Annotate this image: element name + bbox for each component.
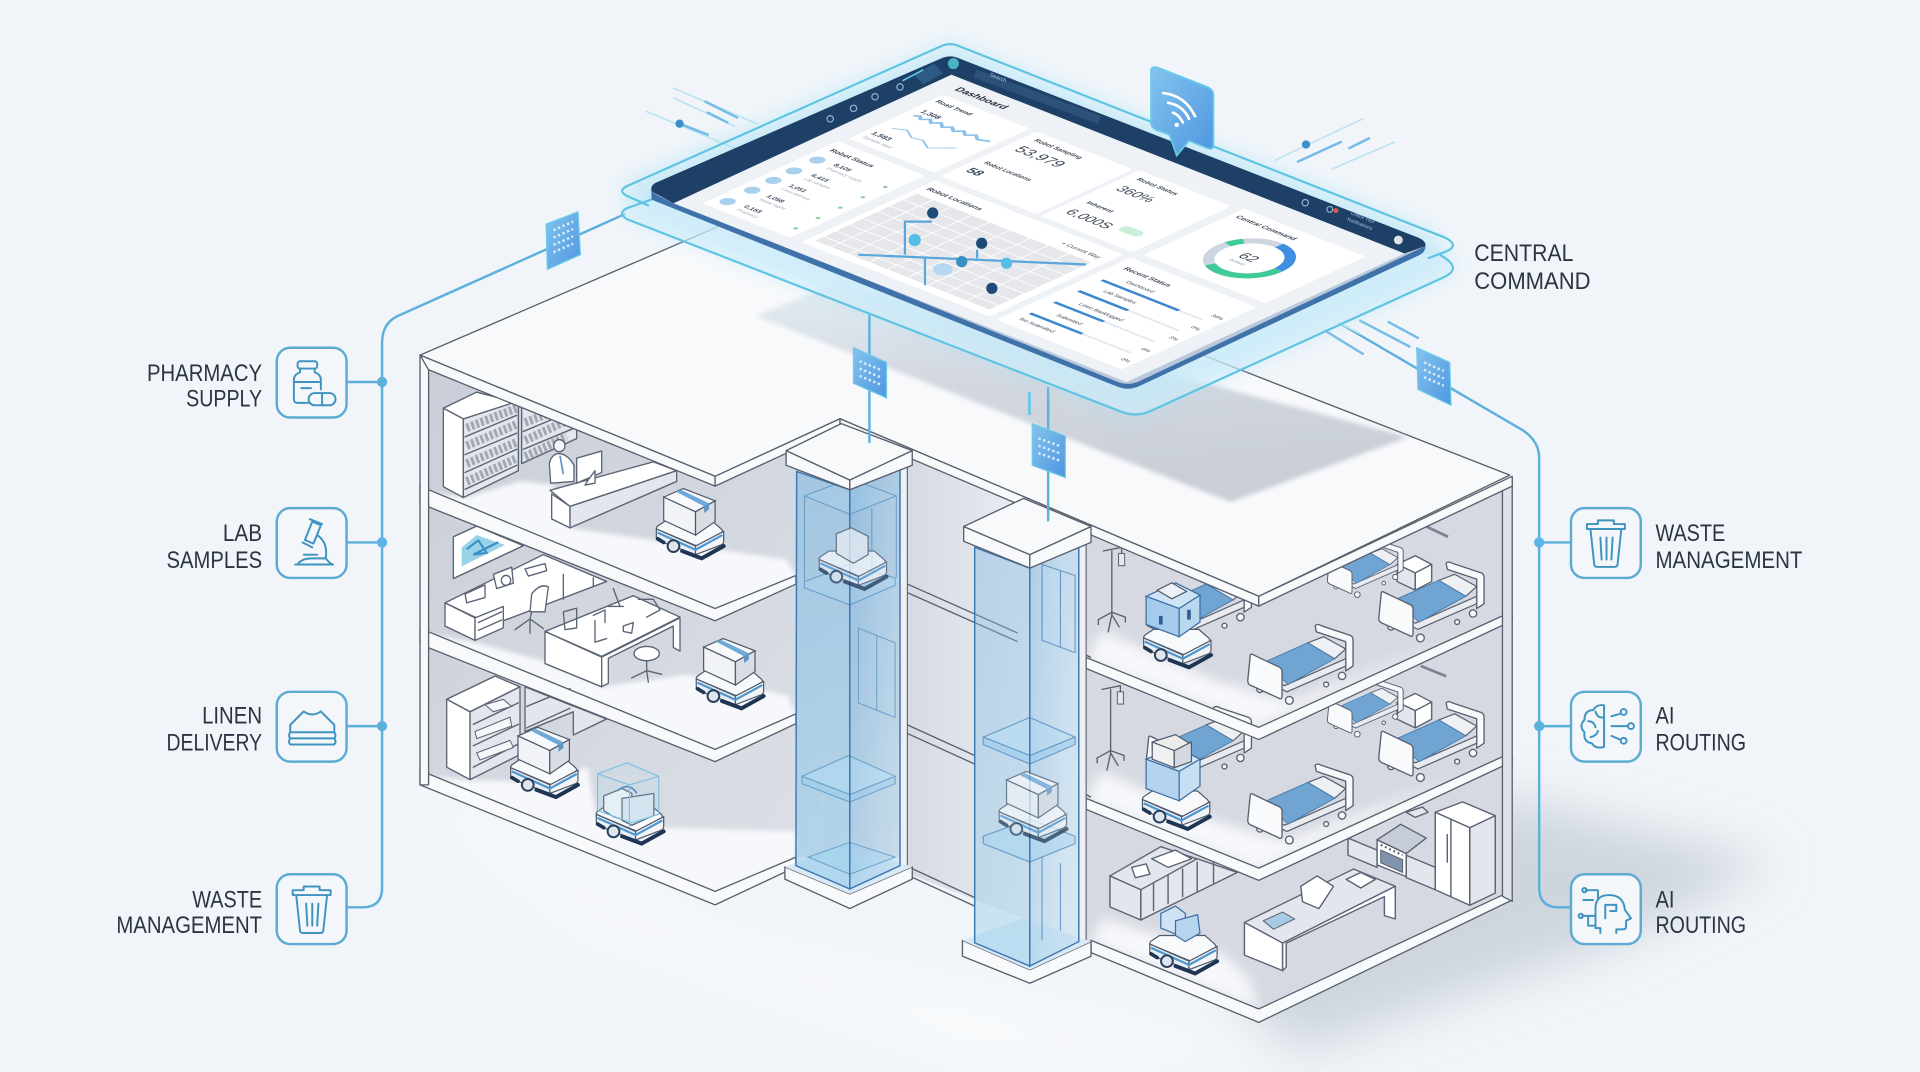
callout: ai routing head: AI [1655,886,1674,913]
recent status card: Recent Status [1121,266,1175,288]
lab centre table [545,589,680,687]
callout: waste management right: MANAGEMENT [1655,547,1802,574]
donut card: Active [1226,258,1246,267]
recent status card: 0% [1138,348,1152,354]
kitchen island [1244,869,1395,971]
dashboard title: Dashboard [951,86,1011,111]
recent status card: 34% [1208,314,1225,321]
robot: kitchen floor [1150,906,1217,973]
robot list card: 1,051 [786,184,808,193]
donut card: 62 [1233,251,1263,264]
robot: upper ward [1144,583,1211,667]
stat card 1: 58 [962,166,989,177]
floors left wing [430,481,798,894]
lab chair [515,586,548,633]
glass [796,468,900,889]
recent status card: Linen Backlogged [1076,303,1125,322]
callout: waste management left [116,874,347,944]
callout: linen delivery: DELIVERY [167,730,262,757]
back wall between elevators [904,453,1259,943]
lower car and door [802,628,895,875]
recent status card: 3% [1166,336,1180,342]
callout: waste management left: MANAGEMENT [116,912,262,939]
kitchen counter [1110,847,1237,920]
upper glass plate [622,44,1453,258]
car [983,564,1075,940]
roof [420,195,1512,606]
trend chart card: 1,583 [868,131,895,142]
recent status card: Ton Submitted [1016,317,1056,334]
callout: lab samples: LAB [223,520,262,547]
room walls left wing [429,362,907,894]
glass [975,546,1079,966]
robot: lab floor [696,639,764,708]
robot list card: 1,058 [764,194,786,204]
wall side strip [1079,542,1086,943]
stat card 2 [1041,170,1231,252]
data tag right [1417,348,1451,405]
elevator 2 [962,498,1091,983]
lab back bench [445,555,607,640]
hospital beds upper ward [1146,540,1484,704]
label: central command: COMMAND [1474,268,1591,295]
glow under plates [625,44,1455,416]
stat card 2: Inherent [1084,201,1116,214]
floor slabs right wing [1086,616,1512,1022]
callout: lab samples: SAMPLES [167,547,262,574]
data flow arrows [647,88,1418,354]
callout: ai routing head [1571,874,1746,944]
kitchen back units and stove [1348,807,1435,890]
robot list card: 6,415 [808,174,831,183]
outer left wall [420,355,429,785]
building [420,195,1512,1022]
callout: linen delivery [167,692,347,762]
hospital beds lower ward [1146,680,1484,844]
callout: pharmacy supply [147,348,347,418]
stat card 1: 53,979 [1010,145,1069,169]
callout: linen delivery: LINEN [202,703,262,730]
linen shelving [447,676,607,780]
robot: glass cargo [596,763,664,844]
donut card [1143,209,1366,303]
floors right wing [1086,631,1457,1010]
robot list card: 8,105 [831,163,853,173]
recent status card: Dashboard [1124,281,1156,294]
ground shadow around building [404,784,1775,1065]
robot list card: Pharmacy supply [824,167,864,183]
callout: ai routing brain: ROUTING [1655,730,1746,757]
recent status card: 0% [1188,326,1202,332]
stat card 1 [940,131,1133,214]
top bar icons: Notifications [1346,217,1374,232]
cap [786,424,912,490]
trend chart card [849,95,1030,173]
top bar icons: Search [989,72,1007,84]
map card: + Current Way [1059,242,1104,260]
reception desk [550,451,677,528]
robot list card: Lab samples [801,177,833,190]
label: central command: CENTRAL [1474,240,1573,267]
elevator 1 [785,424,912,909]
robot list card [703,141,925,238]
callout: pharmacy supply: PHARMACY [147,360,262,387]
callout: waste management right [1571,508,1802,578]
floor slabs left wing [420,485,796,905]
dashboard screen [674,75,1404,382]
recent status card: Submitted [1054,314,1084,326]
stat card 2: 360% [1111,184,1160,205]
map card [801,180,1123,316]
robot: pharmacy floor [656,489,724,558]
callout: waste management right: WASTE [1655,520,1725,547]
donut card: Central Command [1233,214,1300,241]
trend chart card: 1,308 [918,109,945,120]
nightstands [1397,556,1432,728]
tablet body [651,56,1425,389]
furniture left wing [443,392,680,780]
data tag centre right [1032,424,1065,478]
map card: Robot Locations [924,187,986,211]
robot: linen floor [511,727,578,797]
robot list card: 0,153 [741,205,764,214]
callout: ai routing brain [1571,692,1746,762]
upper car [804,479,896,605]
robot list card: Linen delivery [779,188,813,202]
robot list card: Waste mgmt [756,198,788,211]
callout: lab samples [167,508,347,578]
pharmacist [549,440,574,483]
refrigerator [1435,802,1495,905]
pharmacy shelving [443,392,577,497]
recent status card [996,258,1256,369]
tablet shadow on roof [756,284,1408,502]
robot list card: Pharmacy [734,209,760,219]
recent status card: Lab Samples [1101,290,1138,305]
iv stands [1097,547,1125,770]
cap [964,498,1091,568]
recent status card: 0% [1118,358,1132,364]
furniture right wing [1110,525,1495,971]
robot in shaft [999,771,1067,841]
stat card 1: Robot Sampling [1032,139,1084,160]
callout: waste management left: WASTE [192,886,262,913]
map routes and pins [858,207,1086,294]
stat card 2: Robot Status [1134,178,1180,196]
base [962,918,1091,983]
room walls right wing [1084,485,1504,1016]
wall side strip [900,463,907,872]
robot: lower ward [1142,735,1210,829]
callout: ai routing brain: AI [1655,703,1674,730]
outer right wall [1502,480,1512,901]
data tag centre left [853,348,887,398]
robot in shaft [819,528,887,589]
lab wall screen [453,526,523,579]
wifi tag [1151,67,1213,156]
ward ceiling bars [1421,525,1448,676]
lower glass plate [622,200,1453,414]
trend chart card: Road Trend [933,100,974,116]
label: central command [1474,240,1591,295]
data tag left [546,212,580,269]
callout: ai routing head: ROUTING [1655,912,1746,939]
middle wall slabs [907,584,1091,906]
callout: pharmacy supply: SUPPLY [186,386,262,413]
top bar icons: Check Your [1350,211,1376,226]
lab stool [632,646,662,682]
trend chart card: Sample data [860,136,894,149]
top bar icons [827,58,1403,244]
stat card 2: 6,000S [1061,208,1117,231]
base [785,845,912,909]
robot list card: Robot Status [827,148,877,168]
network connector lines [347,214,1571,907]
stat card 1: Robot Locations [981,161,1033,182]
